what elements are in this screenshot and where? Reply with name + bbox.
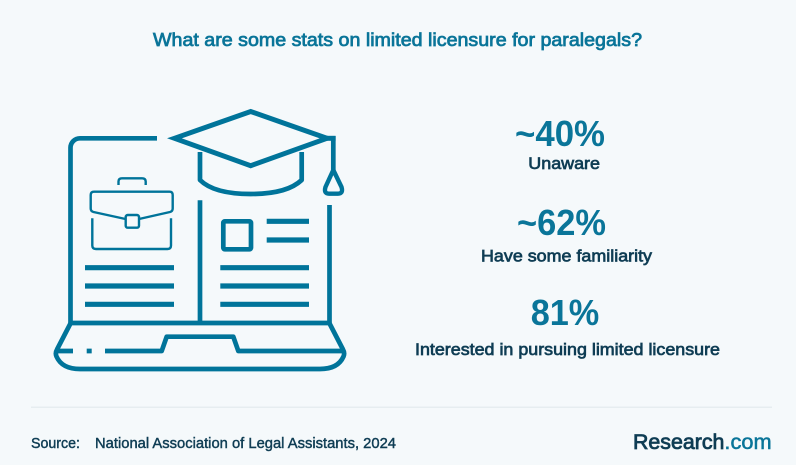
stat: familiarity: ~62% xyxy=(517,202,606,243)
stat: unaware xyxy=(515,113,605,173)
stat: familiarity xyxy=(481,202,653,266)
stat: interested xyxy=(415,292,720,359)
logo: Research.com: .com xyxy=(724,430,772,454)
stat: unaware: Unaware xyxy=(528,154,600,173)
title: What are some stats on limited licensure for paralegals? xyxy=(153,29,642,50)
stat: unaware: ~40% xyxy=(515,113,605,154)
logo: Research.com xyxy=(633,430,772,454)
stat: interested: Interested in pursuing limited licensure xyxy=(415,340,720,359)
icon: graduation cap xyxy=(174,112,342,194)
source line: National Association of Legal Assistants, 2024 xyxy=(95,435,396,452)
icon: laptop with graduation cap xyxy=(56,112,344,369)
icon: briefcase xyxy=(91,178,173,249)
laptop screen frame xyxy=(70,138,330,323)
left page text lines xyxy=(85,268,174,304)
right page text lines xyxy=(220,221,309,304)
stat: familiarity: Have some familiarity xyxy=(481,247,653,266)
logo: Research.com: Research xyxy=(633,430,724,454)
stat: interested: 81% xyxy=(531,292,599,333)
source line: Source: xyxy=(31,435,80,452)
laptop base xyxy=(56,323,344,369)
right page image placeholder xyxy=(223,221,251,249)
